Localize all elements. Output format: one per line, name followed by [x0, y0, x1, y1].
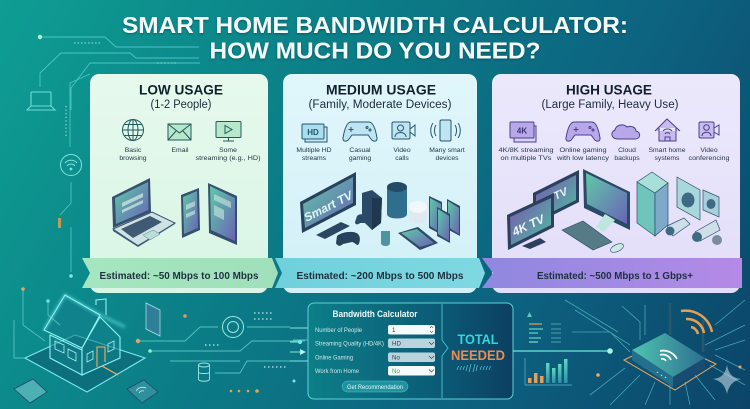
signal line with node [513, 348, 613, 354]
router white wifi [660, 351, 677, 361]
ribbon: low estimate [82, 258, 278, 288]
database icon [198, 363, 210, 381]
online gaming field [388, 352, 435, 362]
phones illustration [398, 196, 460, 250]
door and steps [97, 347, 118, 375]
streaming quality field: HD [392, 340, 401, 348]
icon: globe [122, 120, 144, 140]
smart speaker illustration [381, 182, 427, 246]
icon: HD monitors: HD [307, 128, 319, 137]
left traces [14, 289, 60, 358]
high feature labels: Smart home [648, 147, 686, 154]
total needed readout: TOTAL [458, 331, 499, 347]
orange nodes [596, 366, 742, 377]
medium feature labels: Many smart [429, 147, 465, 154]
panel: high usage [492, 74, 740, 293]
online gaming field: No [392, 354, 400, 362]
windows [55, 341, 114, 362]
field labels: Number of People [315, 327, 363, 334]
streaming quality field [388, 338, 435, 348]
small dot grid [205, 313, 286, 367]
medium heading: MEDIUM USAGE [326, 82, 436, 98]
ribbon: high estimate: Estimated: ~500 Mbps to 1 Gbps+ [537, 271, 693, 282]
low feature labels [119, 147, 260, 162]
high feature labels: Online gaming [560, 147, 607, 154]
medium feature labels: Casual [349, 147, 371, 154]
game console illustration [336, 190, 382, 246]
house walls [44, 295, 120, 375]
get recommendation button [342, 381, 408, 392]
calculator divider arrow [442, 304, 448, 398]
laptop illustration [112, 178, 175, 247]
icon: 4K monitors: 4K [517, 126, 527, 136]
network gear icon [222, 316, 244, 338]
appliances illustration [637, 172, 719, 236]
icon: HD monitors [302, 124, 327, 142]
orange dots [230, 389, 259, 393]
ribbon: high estimate [482, 258, 742, 288]
tablet device [146, 303, 160, 336]
desktop computer illustration [562, 169, 630, 254]
node dots [21, 287, 187, 353]
ribbon: medium estimate [275, 258, 485, 288]
high feature labels [498, 147, 730, 162]
icon: video call [392, 122, 415, 139]
medium feature labels: Multiple HD [296, 147, 332, 154]
high feature labels: backups [614, 155, 640, 162]
work from home field: No [392, 368, 400, 375]
ribbon: low estimate: Estimated: ~50 Mbps to 100 Mbps [100, 271, 259, 282]
medium subheading: (Family, Moderate Devices) [308, 99, 452, 111]
high feature labels: on multiple TVs [500, 155, 552, 162]
calculator title: Bandwidth Calculator [332, 309, 418, 320]
high heading: HIGH USAGE [566, 82, 652, 98]
sparkle [713, 365, 741, 394]
icon: smart home [655, 119, 680, 141]
icon: wifi ring [60, 154, 82, 176]
4K TVs illustration: TV [552, 185, 571, 203]
total needed readout: NEEDED [451, 347, 505, 363]
icon: gamepad [343, 122, 377, 141]
low panel card [90, 74, 268, 293]
panel: bandwidth calculator [308, 303, 513, 399]
high feature labels: Video [700, 147, 718, 154]
number of people field [388, 325, 435, 334]
high subheading: (Large Family, Heavy Use) [542, 99, 679, 111]
high feature labels: with low latency [556, 155, 610, 162]
field labels [315, 327, 384, 375]
4K TVs illustration: 4K TV [509, 211, 548, 239]
field labels: Online Gaming [315, 354, 354, 362]
panel: medium usage [283, 74, 477, 293]
router body [632, 333, 705, 387]
smart home illustration [14, 287, 308, 403]
medium feature labels: gaming [349, 155, 371, 162]
number of people field: 1 [392, 327, 396, 334]
bar chart [525, 358, 572, 385]
medium feature labels: calls [395, 155, 409, 162]
high feature labels: Cloud [618, 147, 636, 154]
connector arrows into calculator [290, 328, 308, 382]
medium feature labels: Video [393, 147, 411, 154]
speed hatch [457, 364, 490, 372]
tablet illustration [208, 183, 237, 245]
title: HOW MUCH DO YOU NEED? [210, 38, 540, 64]
icon: envelope [168, 124, 191, 140]
medium feature labels [296, 147, 465, 162]
low heading: LOW USAGE [139, 82, 223, 98]
wifi hub device [127, 380, 158, 403]
security cameras illustration [666, 218, 722, 245]
circuit traces: top left [38, 35, 200, 272]
circuit lines from house [138, 327, 308, 373]
4K TVs illustration [507, 170, 579, 250]
icon: smart device signals [431, 120, 460, 141]
icon: laptop outline [27, 92, 55, 110]
smart TV illustration [300, 172, 356, 239]
panel: low usage [90, 74, 268, 293]
router circuit traces [565, 300, 745, 405]
high feature labels: 4K/8K streaming [498, 147, 554, 154]
low feature labels: Basic [125, 147, 142, 154]
medium panel card [283, 74, 477, 293]
phone illustration [181, 188, 200, 238]
low feature labels: streaming (e.g., HD) [196, 155, 260, 162]
title: SMART HOME BANDWIDTH CALCULATOR: [122, 12, 628, 38]
high feature labels: systems [655, 155, 680, 162]
high panel card [492, 74, 740, 293]
router indicator lights [657, 372, 666, 378]
low feature labels: browsing [119, 155, 147, 162]
total needed readout [451, 331, 505, 363]
title [122, 12, 628, 64]
high feature labels: conferencing [688, 155, 730, 162]
hub device [14, 379, 47, 403]
low feature labels: Some [219, 147, 237, 154]
platform [25, 335, 145, 392]
house glow [44, 295, 125, 330]
low subheading: (1-2 People) [150, 99, 212, 111]
icon: gamepad [566, 122, 600, 141]
icon: cloud [612, 125, 640, 139]
get recommendation button: Get Recommendation [347, 384, 404, 391]
router illustration [596, 303, 742, 394]
orange wifi signal [681, 311, 712, 334]
circuit accents: left edge [58, 106, 73, 278]
medium feature labels: streams [302, 155, 327, 162]
router glow base [624, 340, 716, 390]
low feature labels: Email [172, 147, 189, 154]
ribbon: medium estimate: Estimated: ~200 Mbps to 500 Mbps [296, 271, 464, 282]
icon: 4K monitors [510, 122, 536, 142]
icon: video conference [699, 122, 719, 138]
calculator card [308, 303, 513, 399]
mini status list [527, 312, 561, 342]
antennas [670, 303, 703, 352]
smart TV illustration: Smart TV [302, 188, 356, 225]
medium feature labels: devices [435, 155, 459, 162]
field labels: Work from Home [315, 368, 360, 375]
work from home field [388, 366, 435, 376]
icon: streaming monitor [216, 122, 241, 141]
field labels: Streaming Quality (HD/4K) [315, 340, 384, 348]
